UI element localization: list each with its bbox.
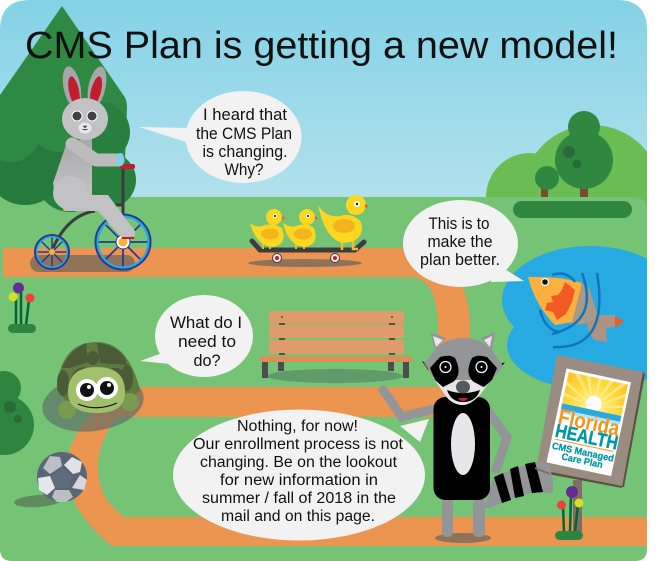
bubble: raccoon: Our enrollment process is not	[193, 436, 404, 453]
bubble: raccoon	[173, 410, 429, 540]
rabbit arm	[72, 144, 118, 160]
bench	[260, 311, 412, 383]
bubble: fish: plan better.	[420, 250, 500, 269]
bubble: rabbit	[139, 91, 302, 183]
pond	[502, 246, 647, 384]
soccer ball	[14, 452, 87, 509]
flowers left	[8, 282, 36, 333]
bubble: raccoon: changing. Be on the lookout	[200, 454, 398, 471]
logo: Care Plan	[560, 452, 604, 471]
bubble: turtle: need to	[178, 332, 236, 351]
logo: CMS Managed	[551, 441, 615, 465]
duck 1	[250, 209, 285, 249]
bubble: fish	[403, 200, 524, 287]
left tree	[0, 6, 136, 212]
logo text: Florida	[556, 404, 623, 441]
bubble: fish: make the	[428, 232, 492, 251]
bubble: fish: This is to	[428, 214, 490, 233]
duck 2	[283, 209, 318, 249]
hedge	[513, 201, 632, 218]
rabbit leg	[53, 176, 135, 239]
title: CMS Plan is getting a new model!	[25, 25, 618, 67]
skateboard shadow	[248, 259, 362, 267]
bush left	[0, 371, 34, 455]
bubble: rabbit: is changing.	[202, 142, 288, 161]
rabbit head	[62, 98, 108, 140]
bubble: turtle	[140, 295, 253, 377]
raccoon	[381, 332, 507, 543]
logo: HEALTH	[553, 421, 620, 455]
skateboard	[252, 241, 364, 262]
right hills and trees	[486, 111, 647, 210]
raccoon head	[422, 332, 505, 405]
grass	[0, 197, 647, 561]
sky background	[0, 0, 647, 200]
orange path	[3, 248, 647, 546]
duck 3	[318, 195, 369, 250]
turtle	[42, 342, 144, 432]
bubble: raccoon: mail and on this page.	[221, 508, 375, 525]
bubble: turtle: do?	[194, 351, 220, 370]
logo	[547, 368, 631, 476]
bubble: rabbit: the CMS Plan	[196, 124, 292, 143]
raccoon tail	[484, 462, 553, 508]
sign post	[573, 480, 582, 532]
bubble: raccoon: Nothing, for now!	[237, 418, 358, 435]
rabbit ears	[62, 66, 106, 104]
bubble: rabbit: Why?	[224, 160, 264, 179]
flowers right	[555, 486, 584, 540]
fish	[528, 273, 624, 347]
bubble: turtle: What do I	[170, 313, 242, 332]
bubble: rabbit: I heard that	[203, 105, 287, 124]
rabbit on tricycle	[35, 65, 150, 270]
bubble: raccoon: summer / fall of 2018 in the	[202, 490, 396, 507]
sign	[536, 355, 645, 488]
front wheel	[96, 214, 150, 270]
rear wheel	[35, 235, 69, 269]
bubble: raccoon: for new information in	[220, 472, 378, 489]
bicycle shadow	[30, 255, 135, 272]
rabbit body	[53, 138, 92, 195]
sign brace	[535, 468, 550, 474]
